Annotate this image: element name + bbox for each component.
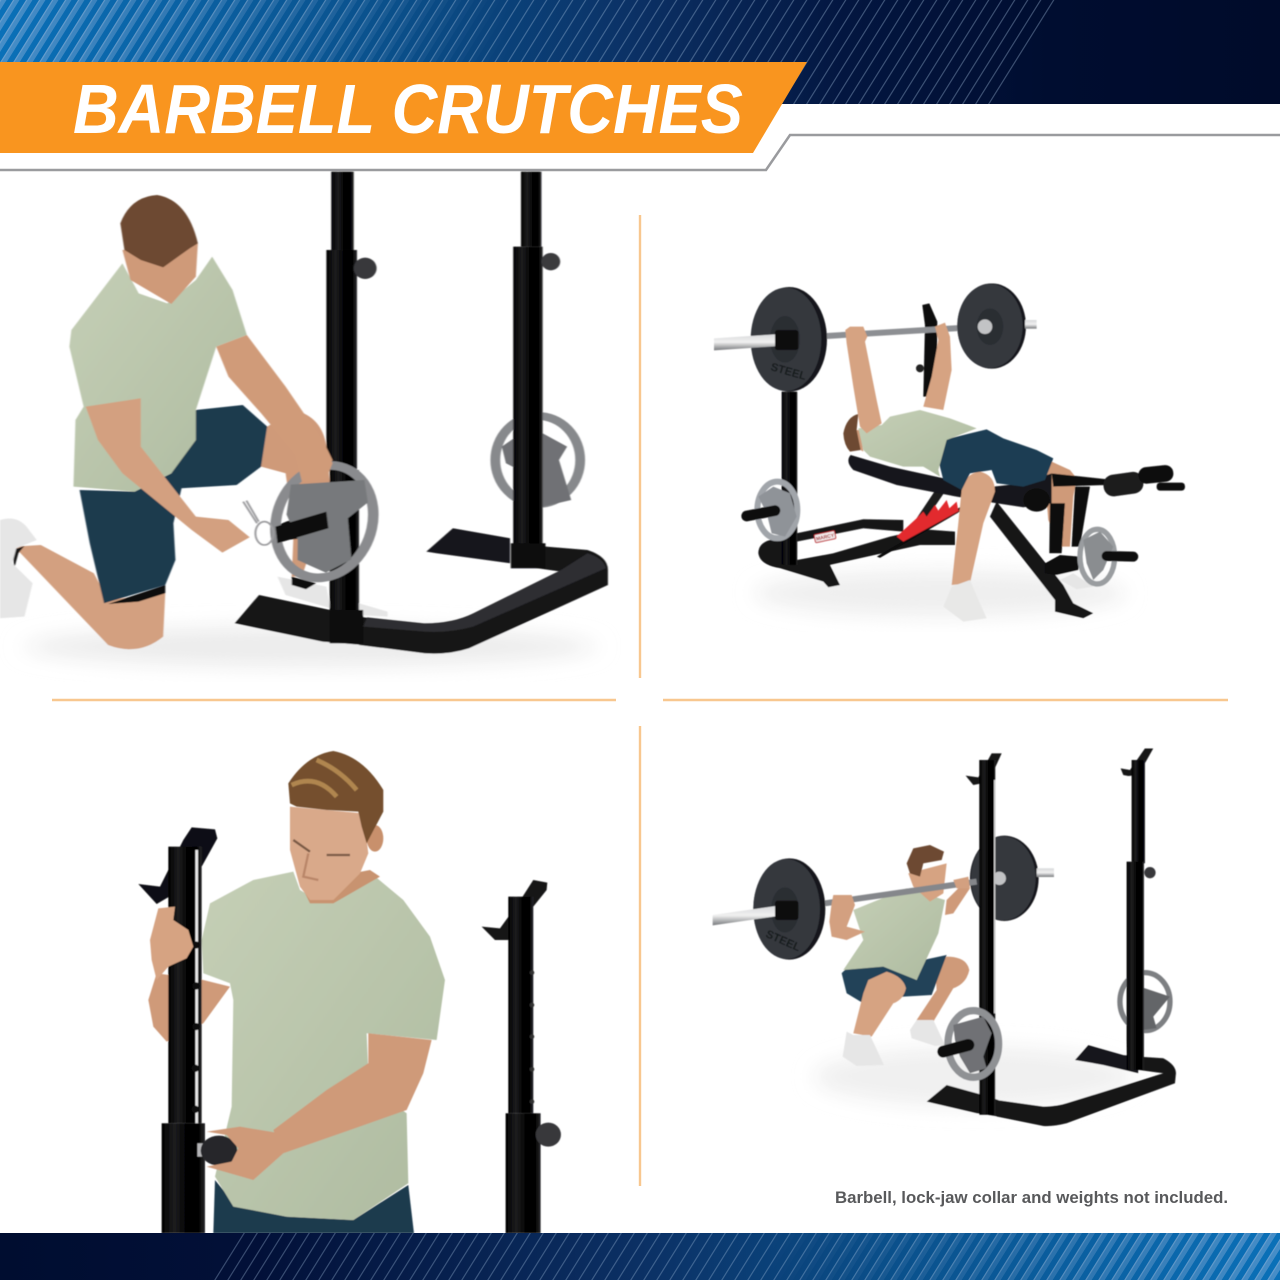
arm behind post: [148, 973, 230, 1042]
footer band: [0, 1233, 1280, 1280]
floor shadow: [813, 1047, 1133, 1107]
hand on knob: [207, 1127, 283, 1180]
other shoe: [277, 577, 388, 617]
right big plate: [957, 283, 1026, 369]
right hand: [953, 877, 970, 888]
neck and head: [288, 751, 383, 903]
near shoe: [943, 580, 987, 622]
left big plate: STEEL: [769, 361, 808, 383]
hand gripping plate: [296, 443, 333, 482]
bench pad: [848, 455, 1052, 507]
spring collar: [243, 501, 273, 545]
bench leg support: [990, 502, 1093, 618]
plate sleeve: [275, 512, 328, 543]
far rack post: [916, 303, 937, 397]
panel: squat: [713, 748, 1176, 1126]
far arm: [945, 887, 970, 915]
sleeve and collar: [269, 513, 331, 544]
front rack post: [235, 172, 377, 645]
shirt: [69, 257, 247, 492]
barbell shaft: [827, 327, 983, 336]
divider vertical bottom: [639, 726, 641, 1186]
forearm: [273, 1033, 432, 1153]
viewer-left arm with hand: [86, 398, 250, 553]
near leg: [853, 972, 906, 1037]
right barbell plate behind post: [970, 836, 1054, 921]
panel: loading a plate: [0, 172, 608, 667]
brand badge: [814, 531, 836, 543]
shirt: [202, 872, 445, 1220]
viewer-right arm: [216, 335, 333, 482]
U-shaped base: [359, 545, 608, 654]
right crutch post: [482, 880, 561, 1233]
shirt: [858, 410, 977, 477]
brand badge: MARCY: [816, 533, 835, 542]
small plate and sleeve right: [1080, 529, 1133, 584]
head: [843, 414, 863, 452]
near arm and hand: [829, 895, 865, 940]
divider horizontal left: [52, 699, 616, 701]
back rack post with plate: [426, 172, 580, 563]
near shoe: [843, 1032, 884, 1066]
kneeling leg and shoe: [0, 518, 165, 649]
shorts: [213, 1180, 414, 1233]
head and hair: [120, 195, 198, 304]
left barbell plate: [713, 858, 825, 960]
red ratchet: [877, 488, 967, 558]
rack base frame: [758, 519, 955, 587]
far leg: [917, 957, 969, 1022]
adjustment knob: [197, 1136, 237, 1166]
divider vertical top: [639, 215, 641, 678]
shirt: [843, 888, 945, 980]
sleeves and collar: [714, 319, 1037, 350]
header accent line: [0, 135, 1280, 170]
shorts: [938, 429, 1053, 490]
near rack post: [782, 392, 797, 565]
shorts: [842, 955, 947, 1003]
bent leg: [261, 410, 330, 577]
front plate and sleeve: [943, 1011, 999, 1077]
divider horizontal right: [663, 699, 1228, 701]
far shoe: [1060, 573, 1093, 589]
front post and foot: [927, 753, 1002, 1117]
left barbell plate: STEEL: [764, 928, 802, 954]
near leg: [952, 472, 995, 585]
small plate and sleeve left: [747, 482, 797, 538]
right post: [1121, 748, 1156, 1070]
arms and hands: [845, 323, 952, 433]
left crutch post: [138, 827, 217, 1233]
title banner: [0, 62, 807, 153]
hand on post: [150, 907, 193, 980]
right post plate: [1120, 973, 1170, 1031]
barbell shaft: [825, 882, 977, 903]
floor shadow: [24, 627, 596, 667]
panel: bench press: [714, 283, 1185, 622]
weight plate and sleeve: [265, 459, 384, 584]
leg developer: [1023, 464, 1185, 575]
header band: [0, 0, 1280, 104]
floor shadow: [753, 570, 1127, 617]
U-shaped base: [997, 1045, 1176, 1126]
title text: BARBELL CRUTCHES: [73, 70, 743, 148]
far shoe: [910, 1020, 945, 1046]
panel: adjusting the crutch: [138, 751, 561, 1233]
shorts: [80, 405, 267, 604]
disclaimer note: Barbell, lock-jaw collar and weights not included.: [835, 1188, 1228, 1207]
left big plate: [751, 287, 827, 392]
far leg: [1045, 462, 1077, 547]
head: [907, 845, 947, 902]
